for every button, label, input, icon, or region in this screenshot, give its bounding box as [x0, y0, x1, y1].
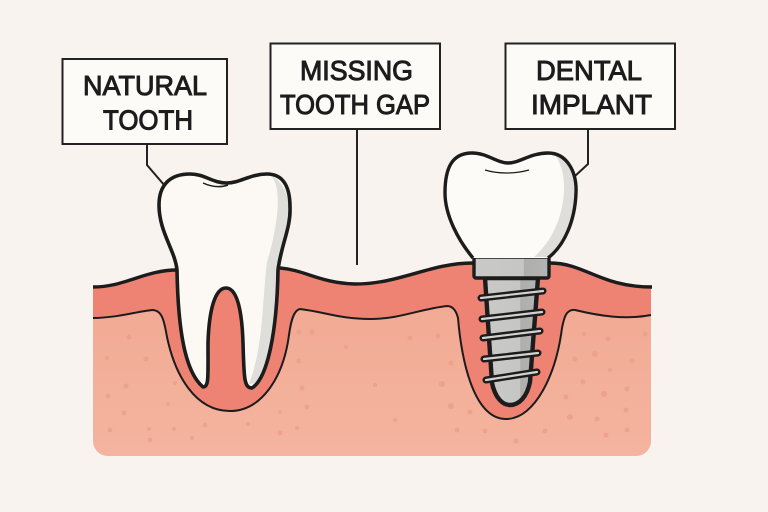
label: dental implant: DENTAL [536, 55, 642, 86]
leader line: dental implant [575, 129, 588, 176]
screw threads [481, 291, 543, 380]
bone speckles [105, 330, 648, 444]
label: missing tooth gap: TOOTH GAP [280, 89, 430, 120]
label: dental implant [506, 44, 675, 129]
implant crown [445, 153, 576, 258]
label: missing tooth gap [270, 44, 440, 129]
gum outline upper [93, 263, 652, 287]
icon: natural tooth [159, 174, 290, 388]
jaw bone [93, 300, 651, 456]
label: dental implant: IMPLANT [531, 89, 652, 120]
label: natural tooth [62, 59, 227, 144]
panel: gum and bone cross-section [93, 263, 652, 456]
gum tissue [93, 263, 651, 419]
label: natural tooth: TOOTH [103, 104, 193, 136]
implant abutment [474, 257, 549, 278]
implant screw [485, 278, 538, 405]
leader line: missing tooth gap [356, 129, 358, 265]
label: natural tooth: NATURAL [83, 70, 207, 101]
label: missing tooth gap: MISSING [300, 55, 413, 86]
leader line: natural tooth [147, 144, 165, 186]
icon: dental implant [445, 153, 576, 405]
gum outline lower [93, 306, 651, 419]
